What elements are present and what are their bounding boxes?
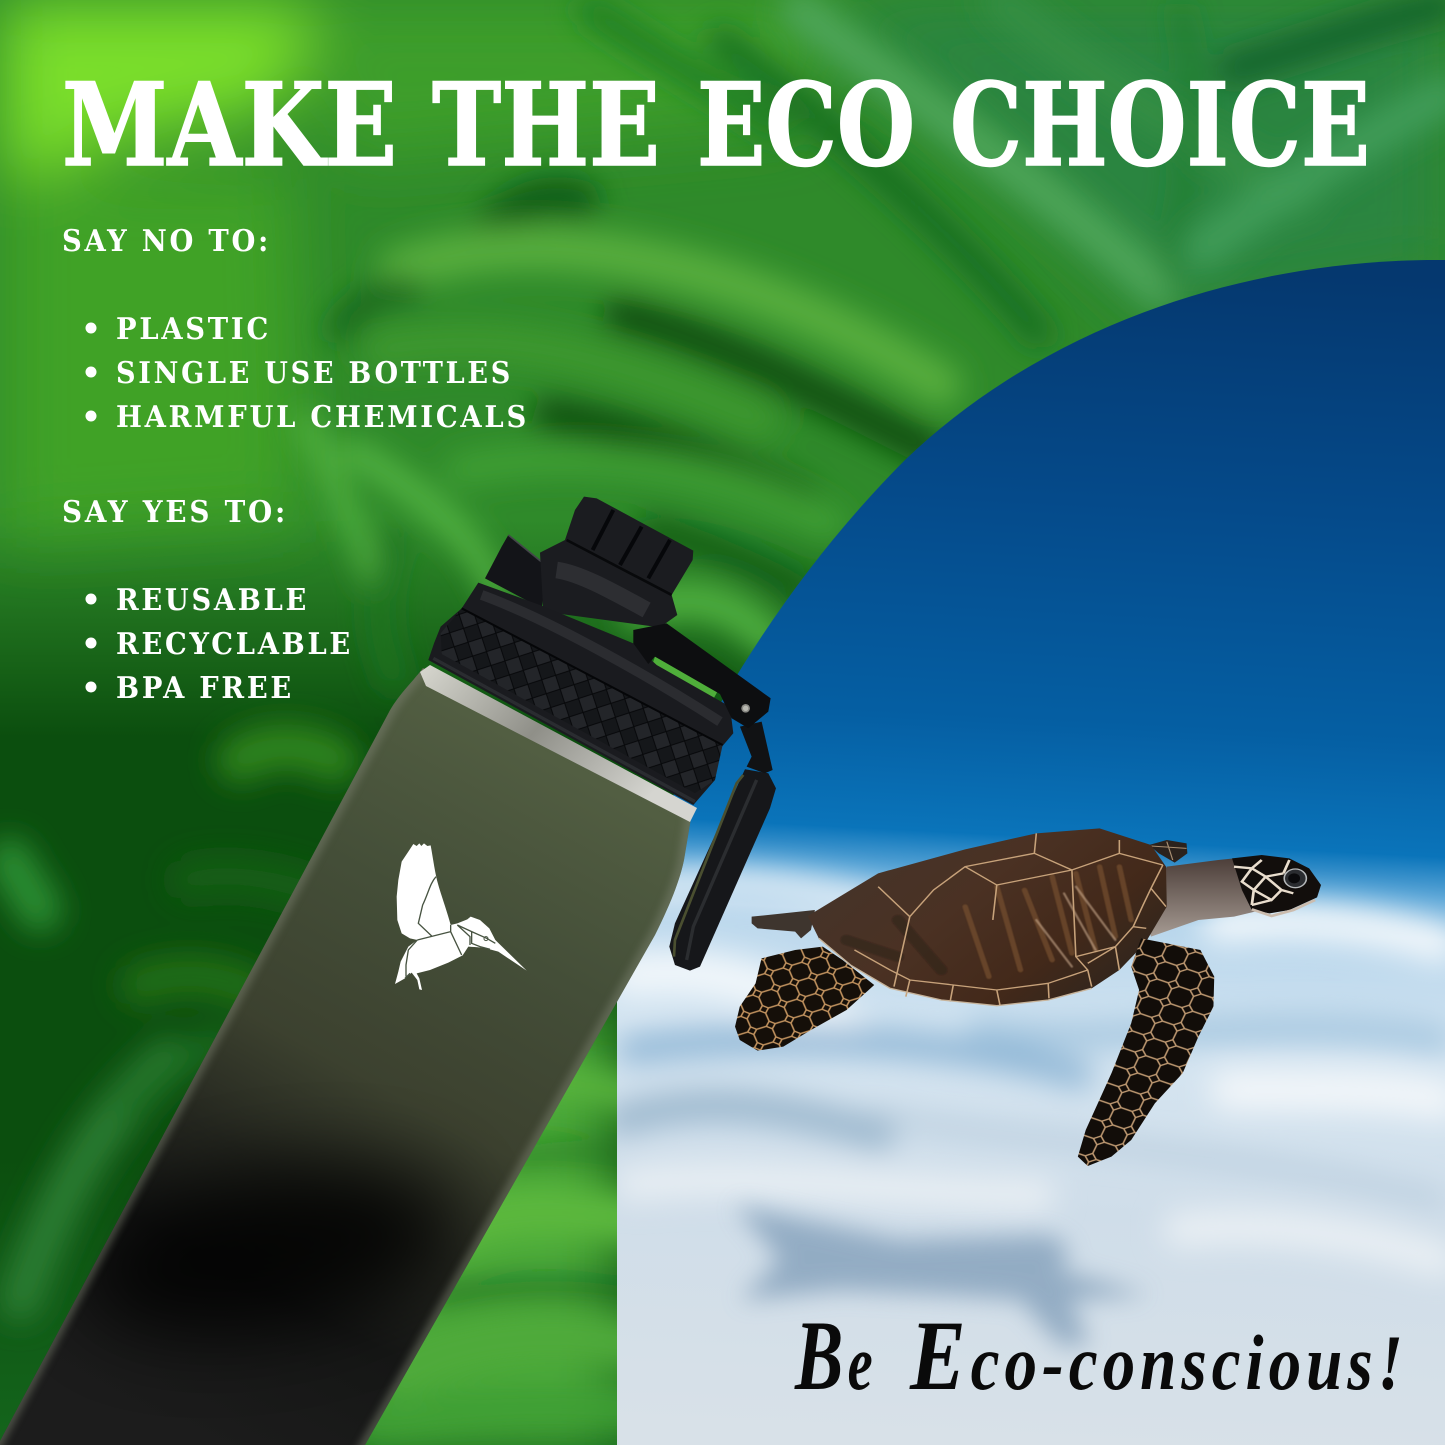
bird logo (395, 843, 527, 990)
rear flipper (735, 947, 874, 1051)
title (62, 58, 1370, 192)
bottle (0, 497, 776, 1445)
turtle shadow (735, 1205, 1150, 1345)
panel: ocean arch (617, 260, 1445, 1445)
tail flipper (752, 910, 815, 938)
turtle (735, 828, 1321, 1166)
green gap under arm (622, 648, 718, 708)
bullet: plastic: PLASTIC (116, 312, 271, 347)
title: MAKE (62, 58, 397, 192)
sand seabed (620, 882, 1440, 1260)
say yes to list (62, 495, 353, 706)
bottle body (0, 660, 700, 1445)
loop carabiner (669, 769, 776, 971)
bullet: recyclable: RECYCLABLE (116, 627, 353, 662)
heading: say yes to: SAY YES TO: (62, 495, 288, 530)
heading: say no to: SAY NO TO: (62, 224, 271, 259)
bullet: bpa free: BPA FREE (116, 671, 294, 706)
front flipper (1078, 938, 1214, 1166)
shell (808, 828, 1167, 1006)
front small flipper (1149, 840, 1187, 863)
bullet: single use bottles: SINGLE USE BOTTLES (116, 356, 513, 391)
neck (1143, 858, 1262, 937)
grip band (441, 608, 723, 793)
spout (485, 535, 547, 608)
hinge arm (633, 623, 771, 728)
title: THE (432, 58, 660, 192)
strap (740, 722, 773, 773)
metal rim (420, 665, 697, 822)
say no to list (62, 224, 529, 435)
bullet: reusable: REUSABLE (116, 583, 309, 618)
head (1232, 855, 1321, 916)
knob (540, 497, 693, 627)
collar (428, 583, 733, 805)
tagline: Be (794, 1300, 877, 1411)
bullet: harmful chemicals: HARMFUL CHEMICALS (116, 400, 529, 435)
cap (428, 497, 776, 971)
title: ECO (697, 58, 915, 192)
